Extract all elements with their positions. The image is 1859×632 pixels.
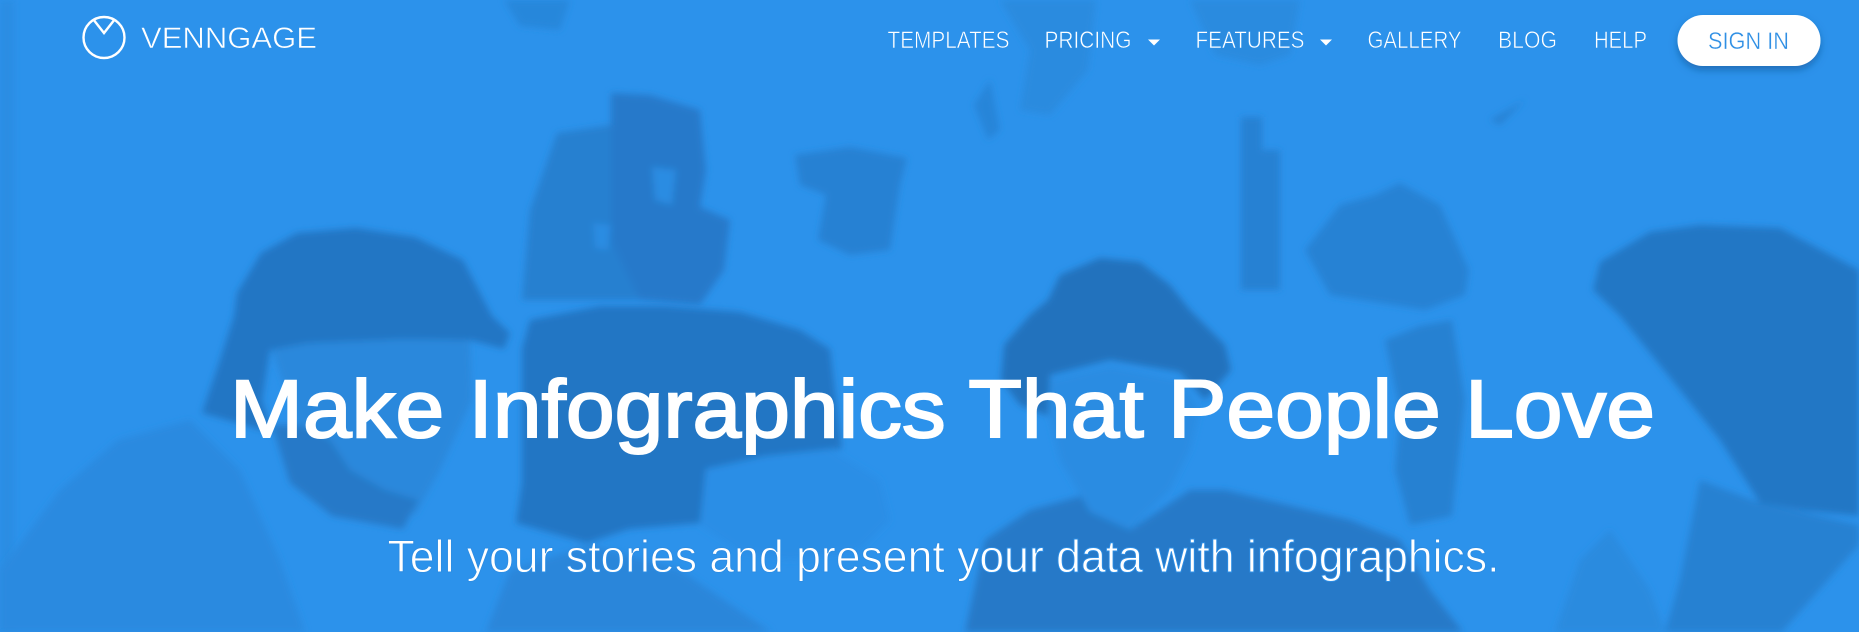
- nav: pricing: PRICING: [1044, 27, 1132, 54]
- person: woman with curly hair: [486, 306, 890, 632]
- nav: templates: TEMPLATES: [888, 27, 1010, 54]
- jacket: [965, 490, 1463, 632]
- hair: [1593, 225, 1859, 516]
- icon: features dropdown arrow: [1320, 40, 1332, 46]
- title: Make Infographics That People Love: [230, 364, 1655, 455]
- navigation: [888, 27, 1647, 54]
- beard: [272, 425, 418, 529]
- person: man on the left: [0, 228, 510, 632]
- nav: gallery: GALLERY: [1368, 27, 1462, 54]
- face: [270, 335, 472, 515]
- curly hair: [516, 306, 842, 543]
- person: woman on the right: [1555, 225, 1859, 632]
- subtitle: Tell your stories and present your data with infographics.: [388, 531, 1500, 582]
- face: [1048, 366, 1200, 530]
- nav: help: HELP: [1594, 27, 1647, 54]
- nav: features: FEATURES: [1196, 27, 1304, 54]
- logo wordmark: VENNGAGE: [141, 22, 317, 55]
- sign in button: SIGN IN: [1708, 28, 1789, 55]
- face: [700, 449, 890, 560]
- hat: [1001, 258, 1231, 416]
- sign in button: [1678, 15, 1820, 66]
- hand shadow: [1555, 530, 1665, 632]
- logo: venngage: [84, 17, 317, 58]
- shirt: [0, 420, 305, 632]
- hair: [202, 228, 510, 433]
- shoulder: [1665, 480, 1859, 632]
- icon: pricing dropdown arrow: [1148, 40, 1160, 46]
- person: man in hat: [965, 258, 1463, 632]
- nav: blog: BLOG: [1498, 27, 1557, 54]
- icon: logo circle: [84, 17, 124, 58]
- body: [486, 545, 771, 632]
